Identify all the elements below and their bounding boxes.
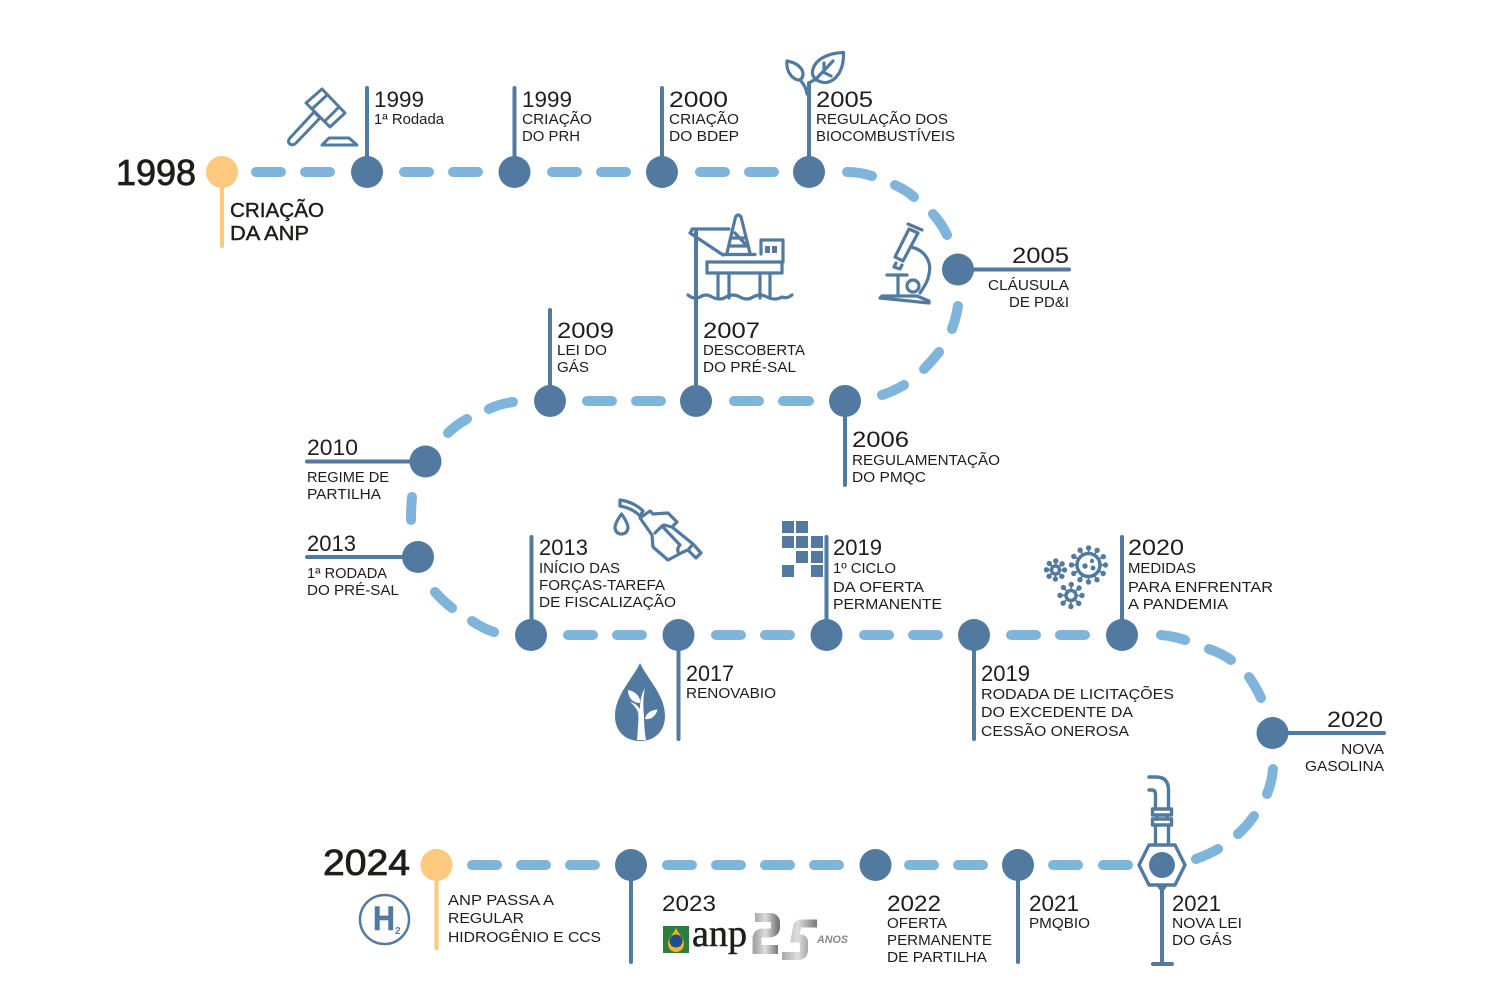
milestone 2022 oferta permanente de partilha: PERMANENTE xyxy=(887,933,992,949)
milestone 2020 gasolina: 2020 xyxy=(1327,707,1383,732)
milestone 2023 anp 25 anos xyxy=(615,849,849,962)
milestone 2019 excedente xyxy=(958,619,1174,740)
milestone 2009 gas: 2009 xyxy=(557,318,614,343)
milestone 2020 pandemia: PARA ENFRENTAR xyxy=(1128,580,1273,596)
milestone 2019 oferta permanente: 1º CICLO xyxy=(833,561,896,577)
milestone 2019 excedente: CESSÃO ONEROSA xyxy=(981,723,1129,740)
milestone 2005 clausula xyxy=(942,243,1069,311)
milestone 2022 oferta permanente de partilha xyxy=(860,849,992,966)
milestone 2021 PMQBIO: 2021 xyxy=(1029,891,1079,916)
icon: viruses xyxy=(1046,548,1106,606)
milestone 2013 fiscalizacao xyxy=(515,535,676,651)
icon: green drop with sprout xyxy=(615,663,665,741)
milestone 2013 pre-sal round: DO PRÉ-SAL xyxy=(307,582,399,599)
milestone 2021 PMQBIO xyxy=(1002,849,1090,962)
milestone 2006 PMQC: REGULAMENTAÇÃO xyxy=(852,452,1000,469)
milestone 2005 clausula: CLÁUSULA xyxy=(988,277,1069,294)
icon: gavel xyxy=(288,89,357,145)
milestone 2019 oferta permanente xyxy=(810,535,942,651)
milestone 2021 lei do gas with pipe icon: DO GÁS xyxy=(1172,932,1232,949)
logo: anp 25 anos xyxy=(663,913,849,956)
start marker 1998: CRIAÇÃO xyxy=(230,198,324,222)
milestone 2020 gasolina xyxy=(1256,707,1384,775)
milestone 2006 PMQC xyxy=(829,385,1000,486)
milestone 2013 fiscalizacao: DE FISCALIZAÇÃO xyxy=(539,594,676,611)
milestone 2007 pre-sal with platform icon: DO PRÉ-SAL xyxy=(703,359,796,376)
milestone 2010 partilha: 2010 xyxy=(307,435,358,460)
logo: anp 25 anos: anp xyxy=(692,913,747,955)
milestone 2005 clausula: DE PD&I xyxy=(1009,295,1069,311)
milestone 2000 BDEP: CRIAÇÃO xyxy=(669,111,739,128)
milestone 2006 PMQC: 2006 xyxy=(852,427,909,452)
milestone 2005 biocombustiveis with plant icon: BIOCOMBUSTÍVEIS xyxy=(816,128,955,145)
icon: hydrogen H2: 2 xyxy=(395,926,401,937)
milestone 2020 pandemia: 2020 xyxy=(1128,535,1184,560)
milestone 2020 gasolina: NOVA xyxy=(1341,742,1384,758)
milestone 2009 gas xyxy=(534,310,614,417)
start marker 1998 xyxy=(116,152,324,246)
milestone 2019 oferta permanente: DA OFERTA xyxy=(833,580,924,596)
milestone 2019 excedente: 2019 xyxy=(981,661,1030,686)
milestone 2005 biocombustiveis with plant icon xyxy=(787,52,955,188)
icon: pixel grid xyxy=(782,521,823,577)
milestone 2020 pandemia: MEDIDAS xyxy=(1128,561,1196,577)
milestone 2013 fiscalizacao: INÍCIO DAS xyxy=(539,560,620,577)
milestone 1999 PRH: 1999 xyxy=(522,87,572,112)
milestone 1999 PRH xyxy=(498,87,592,188)
milestone 1999 PRH: DO PRH xyxy=(522,129,580,145)
milestone 1999 rodada: 1ª Rodada xyxy=(374,112,445,128)
milestone 2023 anp 25 anos: 2023 xyxy=(662,891,716,916)
logo: anp 25 anos: ANOS xyxy=(816,934,849,946)
milestone 2020 pandemia xyxy=(1106,535,1273,651)
end marker 2024: HIDROGÊNIO E CCS xyxy=(448,929,601,946)
end marker 2024: ANP PASSA A xyxy=(448,893,554,909)
milestone 2010 partilha: REGIME DE xyxy=(307,470,389,486)
dashed timeline path xyxy=(256,172,1273,865)
milestone 2013 fiscalizacao: 2013 xyxy=(539,535,588,560)
icon: microscope xyxy=(880,224,930,303)
end marker 2024: REGULAR xyxy=(448,911,524,927)
milestone 2019 excedente: DO EXCEDENTE DA xyxy=(981,705,1133,721)
milestone 2006 PMQC: DO PMQC xyxy=(852,470,926,486)
milestone 2005 biocombustiveis with plant icon: 2005 xyxy=(816,87,873,112)
milestone 2021 lei do gas with pipe icon xyxy=(1139,777,1242,964)
milestone 2013 pre-sal round xyxy=(307,531,434,599)
milestone 2019 oferta permanente: PERMANENTE xyxy=(833,597,942,613)
milestone 1999 rodada xyxy=(351,87,445,188)
milestone 2017 renovabio xyxy=(662,619,776,739)
milestone 2021 PMQBIO: PMQBIO xyxy=(1029,916,1090,932)
milestone 2013 pre-sal round: 1ª RODADA xyxy=(307,566,387,582)
milestone 2019 oferta permanente: 2019 xyxy=(833,535,882,560)
milestone 2022 oferta permanente de partilha: OFERTA xyxy=(887,916,947,932)
milestone 1999 PRH: CRIAÇÃO xyxy=(522,111,592,128)
milestone 2022 oferta permanente de partilha: 2022 xyxy=(887,891,941,916)
milestone 2017 renovabio: 2017 xyxy=(686,661,734,686)
milestone 2013 fiscalizacao: FORÇAS-TAREFA xyxy=(539,578,665,594)
milestone 2010 partilha xyxy=(307,435,442,503)
milestone 2007 pre-sal with platform icon xyxy=(680,215,805,417)
milestone 2019 excedente: RODADA DE LICITAÇÕES xyxy=(981,686,1174,703)
milestone 2020 pandemia: A PANDEMIA xyxy=(1128,597,1228,613)
milestone 2017 renovabio: RENOVABIO xyxy=(686,686,776,702)
milestone 2009 gas: GÁS xyxy=(557,359,589,376)
milestone 2021 lei do gas with pipe icon: 2021 xyxy=(1172,891,1221,916)
milestone 2000 BDEP: DO BDEP xyxy=(669,129,739,145)
end marker 2024: 2024 xyxy=(323,842,410,883)
milestone 2022 oferta permanente de partilha: DE PARTILHA xyxy=(887,950,987,966)
milestone 2020 gasolina: GASOLINA xyxy=(1305,759,1384,775)
milestone 2005 biocombustiveis with plant icon: REGULAÇÃO DOS xyxy=(816,111,948,128)
icon: hydrogen H2: H xyxy=(373,900,395,938)
end marker 2024 xyxy=(323,842,601,948)
milestone 2007 pre-sal with platform icon: 2007 xyxy=(703,318,760,343)
start marker 1998: DA ANP xyxy=(230,223,309,245)
milestone 2007 pre-sal with platform icon: DESCOBERTA xyxy=(703,343,805,359)
milestone 2021 lei do gas with pipe icon: NOVA LEI xyxy=(1172,916,1242,932)
milestone 2009 gas: LEI DO xyxy=(557,343,607,359)
milestone 2010 partilha: PARTILHA xyxy=(307,487,381,503)
start marker 1998: 1998 xyxy=(116,152,196,193)
icon: fuel nozzle xyxy=(615,500,701,560)
milestone 2013 pre-sal round: 2013 xyxy=(307,531,356,556)
milestone 2000 BDEP: 2000 xyxy=(669,87,728,112)
milestone 1999 rodada: 1999 xyxy=(374,87,424,112)
milestone 2000 BDEP xyxy=(646,87,739,188)
milestone 2005 clausula: 2005 xyxy=(1012,243,1069,268)
icon: hydrogen H2 xyxy=(360,895,409,944)
